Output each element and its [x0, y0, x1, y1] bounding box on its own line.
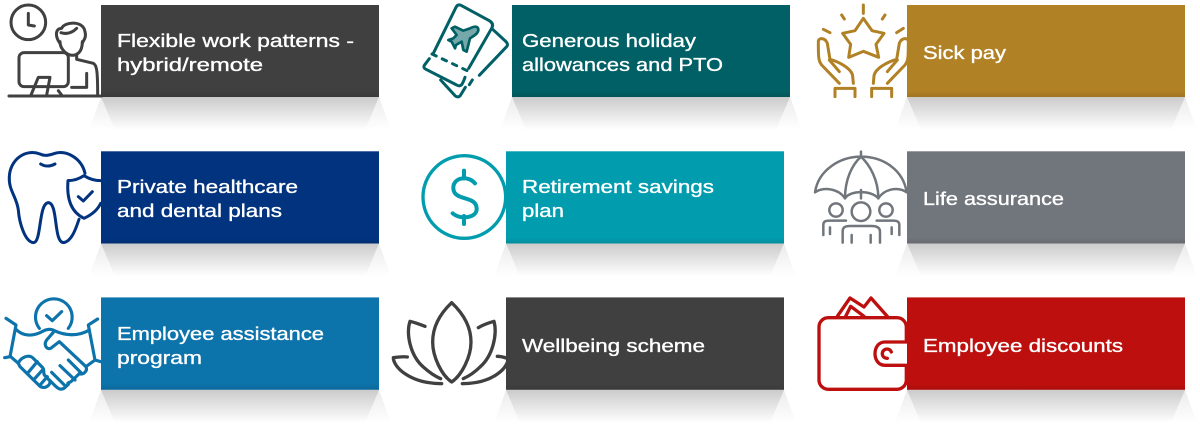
icon: umbrella over family	[815, 152, 907, 243]
label: program	[117, 347, 202, 368]
card: retirement	[423, 151, 796, 276]
label: Life assurance	[923, 188, 1064, 209]
label: allowances and PTO	[522, 54, 723, 75]
card: healthcare	[9, 151, 391, 276]
label	[522, 30, 723, 75]
card: holiday	[424, 5, 802, 130]
label: Retirement savings	[522, 176, 714, 197]
icon: tooth with shield	[9, 153, 101, 243]
label: Private healthcare	[117, 176, 298, 197]
label: Flexible work patterns -	[117, 30, 354, 51]
label	[117, 176, 298, 221]
label	[117, 323, 324, 368]
icon: person at computer with clock	[9, 5, 102, 96]
icon: hands holding star	[818, 5, 908, 97]
card: flexible work	[9, 5, 391, 130]
panel: wellbeing	[506, 297, 784, 390]
card: wellbeing	[393, 297, 796, 423]
panel: holiday	[512, 5, 790, 97]
label: Wellbeing scheme	[522, 335, 705, 356]
card: assistance	[5, 297, 391, 423]
panel: discounts	[907, 297, 1185, 390]
panel: retirement	[506, 151, 784, 244]
icon: plane tickets	[424, 5, 507, 97]
label	[117, 30, 354, 75]
label: plan	[522, 200, 564, 221]
card: sick pay	[818, 5, 1197, 130]
panel: sick pay	[907, 5, 1185, 97]
label: hybrid/remote	[117, 54, 263, 75]
label: Generous holiday	[522, 30, 697, 51]
icon: wallet with notes	[819, 298, 908, 389]
icon: lotus flower	[393, 303, 508, 384]
panel: flexible work	[101, 5, 379, 97]
panel: assistance	[101, 297, 379, 390]
label: and dental plans	[117, 200, 282, 221]
label: Employee discounts	[923, 335, 1123, 356]
panel: life assurance	[907, 151, 1185, 244]
card: life assurance	[815, 151, 1197, 276]
label: Sick pay	[923, 42, 1007, 63]
label	[522, 176, 714, 221]
icon: dollar coin	[423, 156, 506, 238]
icon: handshake with check	[5, 299, 101, 389]
card: discounts	[819, 297, 1197, 423]
label: Employee assistance	[117, 323, 324, 344]
panel: healthcare	[101, 151, 379, 244]
